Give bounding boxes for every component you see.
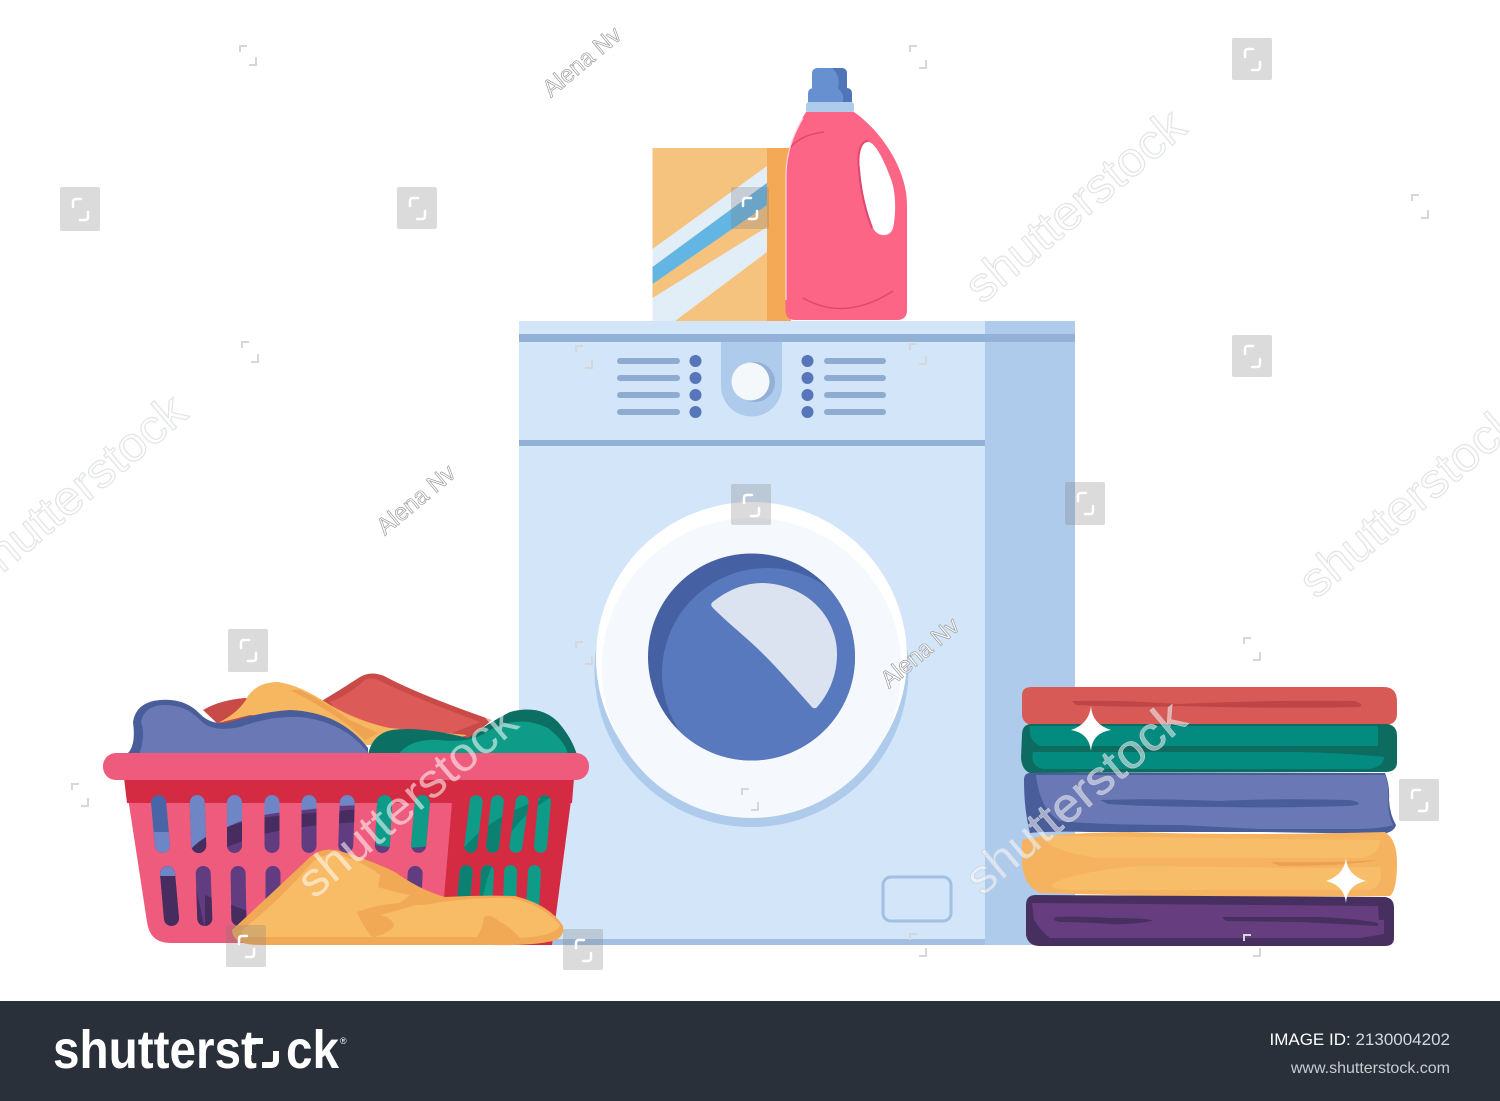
dial housing bbox=[721, 342, 782, 416]
watermark: stack overlay: shutterstock bbox=[955, 691, 1197, 905]
control panel bbox=[617, 342, 886, 418]
watermark: author top: Alena Nv bbox=[538, 21, 627, 103]
watermark: author door: Alena Nv bbox=[876, 612, 965, 694]
watermark: basket overlay: shutterstock bbox=[287, 694, 529, 908]
logo o mark bbox=[249, 1041, 276, 1065]
image id: IMAGE ID: 2130004202 bbox=[1269, 1030, 1450, 1049]
detergent powder box bbox=[652, 148, 791, 321]
basket inner shadow band bbox=[124, 778, 574, 803]
basket body front bbox=[125, 778, 455, 943]
watermark: top right: shutterstock bbox=[955, 99, 1197, 313]
indicator dots bbox=[690, 355, 814, 418]
liquid detergent bottle bbox=[786, 68, 907, 320]
basket side panel bbox=[440, 778, 574, 945]
folded clean clothes stack bbox=[1021, 687, 1397, 946]
bottle body bbox=[786, 112, 907, 320]
folded blue towel bbox=[1024, 773, 1396, 834]
machine trim bands bbox=[519, 334, 1075, 945]
watermark tile marks bbox=[73, 49, 1427, 961]
machine side panel bbox=[985, 321, 1075, 945]
folded green towel bbox=[1021, 724, 1397, 773]
washing machine bbox=[519, 321, 1075, 945]
footer bar bbox=[0, 1001, 1500, 1101]
door bbox=[594, 502, 908, 827]
sparkles bbox=[1071, 706, 1366, 903]
bottle cap bbox=[806, 68, 854, 113]
bottle details bbox=[790, 132, 893, 308]
folded purple towel bbox=[1026, 895, 1394, 946]
watermark tiles bbox=[60, 38, 1439, 970]
basket front holes bbox=[151, 795, 430, 926]
website: www.shutterstock.com bbox=[1290, 1060, 1450, 1077]
green cloth in basket bbox=[368, 710, 577, 755]
program list left bbox=[617, 358, 886, 415]
blue cloth in basket bbox=[128, 700, 368, 755]
door glass bbox=[648, 554, 855, 760]
orange cloth in basket bbox=[218, 682, 467, 745]
laundry basket with dirty clothes bbox=[103, 674, 589, 945]
registered mark: ® bbox=[340, 1036, 347, 1046]
folded orange towel bbox=[1022, 832, 1397, 897]
watermark: author left: Alena Nv bbox=[372, 459, 461, 541]
basket rim bbox=[103, 753, 589, 780]
dial knob bbox=[732, 362, 775, 402]
watermark logo marks bbox=[72, 46, 1428, 956]
orange cloth pile in front bbox=[232, 850, 563, 945]
machine front panel bbox=[519, 321, 986, 945]
footer logo: shutterstock bbox=[53, 1020, 340, 1080]
folded red towel bbox=[1022, 687, 1397, 725]
red cloth in basket bbox=[203, 674, 492, 745]
basket side holes bbox=[457, 795, 551, 906]
drain cover button bbox=[883, 877, 951, 921]
